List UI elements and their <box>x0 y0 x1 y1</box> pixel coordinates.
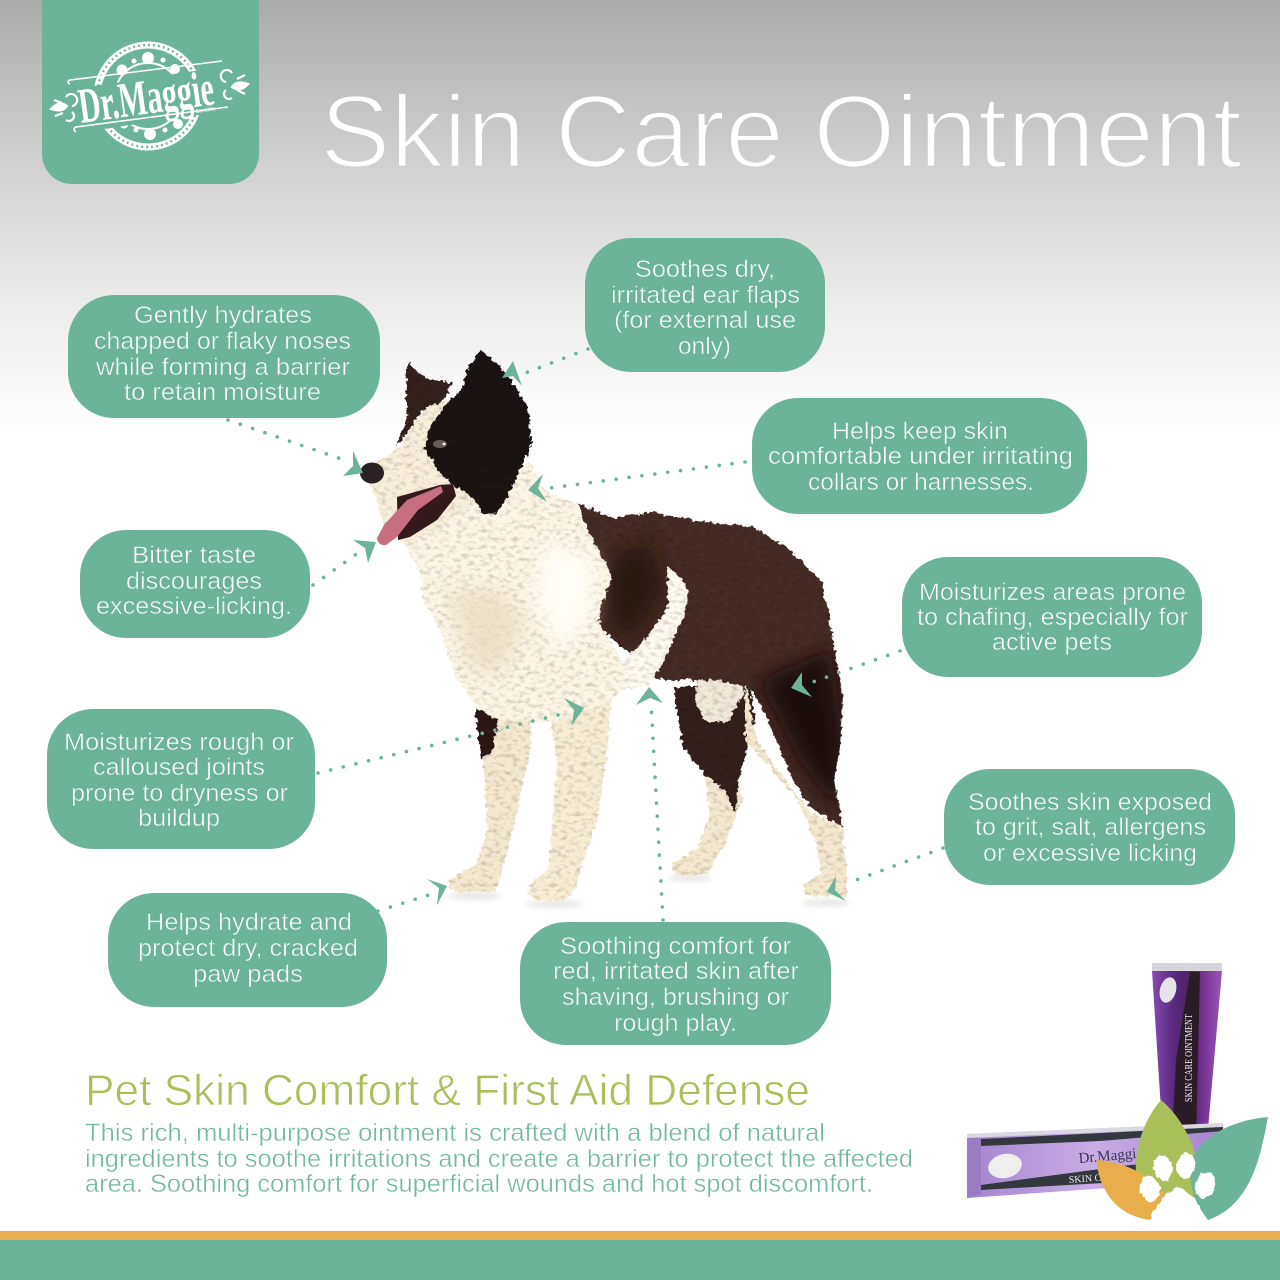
callout: shaving: red, irritated skin after <box>553 958 799 985</box>
callout: ear flaps: irritated ear flaps <box>611 282 800 309</box>
eye <box>433 440 447 448</box>
callout: paw pads: Helps hydrate and <box>146 909 352 936</box>
callout: shaving: rough play. <box>614 1010 737 1037</box>
dotted leader lines <box>228 349 943 920</box>
title: Skin Care Ointment <box>320 74 1242 189</box>
callout: paw pads: paw pads <box>193 961 303 988</box>
chest bright fur <box>535 540 595 650</box>
callout: shaving <box>520 922 831 1045</box>
hind far leg <box>671 672 755 876</box>
subheading: Pet Skin Comfort & First Aid Defense <box>85 1066 810 1115</box>
callout: noses <box>68 295 380 418</box>
callout: collars <box>752 398 1087 514</box>
callout: collars: comfortable under irritating <box>768 443 1073 470</box>
callout: ear flaps: only) <box>678 333 731 360</box>
callout: chafing <box>902 557 1202 677</box>
callout: bitter taste: discourages <box>126 568 262 595</box>
callout: grit and salt: Soothes skin exposed <box>968 789 1212 816</box>
front near leg <box>528 700 611 901</box>
callout: noses: while forming a barrier <box>95 354 350 381</box>
product: carton box <box>967 1123 1223 1198</box>
callout: bitter taste <box>80 530 310 638</box>
hind near leg <box>745 680 848 897</box>
product: ointment tube <box>1152 963 1222 1140</box>
callout: chafing: active pets <box>992 629 1112 656</box>
tongue <box>377 486 443 545</box>
icon: leaves with paw <box>1096 1100 1268 1226</box>
callout: grit and salt: or excessive licking <box>983 840 1197 867</box>
callout: bitter taste: excessive-licking. <box>96 593 292 620</box>
callout: joints: prone to dryness or <box>71 780 288 807</box>
dog photo <box>360 350 850 907</box>
callout: joints: calloused joints <box>93 754 265 781</box>
chest cream <box>403 462 628 722</box>
chest fur shading <box>450 590 525 670</box>
callout: grit and salt <box>944 769 1235 885</box>
arrowheads <box>343 361 846 905</box>
callout: chafing: Moisturizes areas prone <box>919 579 1186 606</box>
callout: chafing: to chafing, especially for <box>917 604 1188 631</box>
callout: joints: buildup <box>138 805 220 832</box>
nose <box>360 462 384 484</box>
callout: collars: Helps keep skin <box>832 418 1008 445</box>
callout: noses: chapped or flaky noses <box>94 328 351 355</box>
paw shadows <box>447 875 850 907</box>
callout: ear flaps: Soothes dry, <box>635 256 775 283</box>
callout: shaving: shaving, brushing or <box>562 984 789 1011</box>
description paragraph: area. Soothing comfort for superficial wounds and hot spot discomfort. <box>85 1170 873 1198</box>
product: carton box: Dr.Maggie <box>1078 1145 1144 1167</box>
product: ointment tube: SKIN CARE OINTMENT <box>1184 1014 1195 1102</box>
body dark shading <box>610 540 845 810</box>
callout: joints <box>47 709 315 849</box>
left ear <box>395 363 452 448</box>
callout: noses: to retain moisture <box>124 379 321 406</box>
callout: grit and salt: to grit, salt, allergens <box>975 814 1206 841</box>
logo panel: Dr. Maggie <box>42 0 259 184</box>
mouth <box>397 484 456 540</box>
black head patch <box>425 350 532 515</box>
product: carton box: SKIN CARE <box>1068 1171 1122 1186</box>
description paragraph: This rich, multi-purpose ointment is crafted with a blend of natural <box>85 1119 825 1147</box>
footer band <box>0 1231 1280 1280</box>
description paragraph <box>85 1119 913 1198</box>
callout: joints: Moisturizes rough or <box>64 729 294 756</box>
callout: paw pads: protect dry, cracked <box>138 935 358 962</box>
logo panel: Dr. Maggie: Dr.Maggie <box>75 60 217 134</box>
brown body <box>577 503 843 828</box>
callout: bitter taste: Bitter taste <box>132 542 256 569</box>
callout: paw pads <box>108 893 387 1007</box>
callout: collars: collars or harnesses. <box>808 469 1034 496</box>
callout: shaving: Soothing comfort for <box>560 933 791 960</box>
logo panel: Dr. Maggie: Est 1991 <box>195 106 216 115</box>
callout: ear flaps <box>585 238 825 372</box>
callout: noses: Gently hydrates <box>134 302 312 329</box>
white stripe <box>615 565 688 690</box>
front far leg <box>448 708 532 893</box>
callout: ear flaps: (for external use <box>614 307 796 334</box>
description paragraph: ingredients to soothe irritations and create a barrier to protect the affected <box>85 1145 913 1173</box>
head cream <box>361 400 475 545</box>
